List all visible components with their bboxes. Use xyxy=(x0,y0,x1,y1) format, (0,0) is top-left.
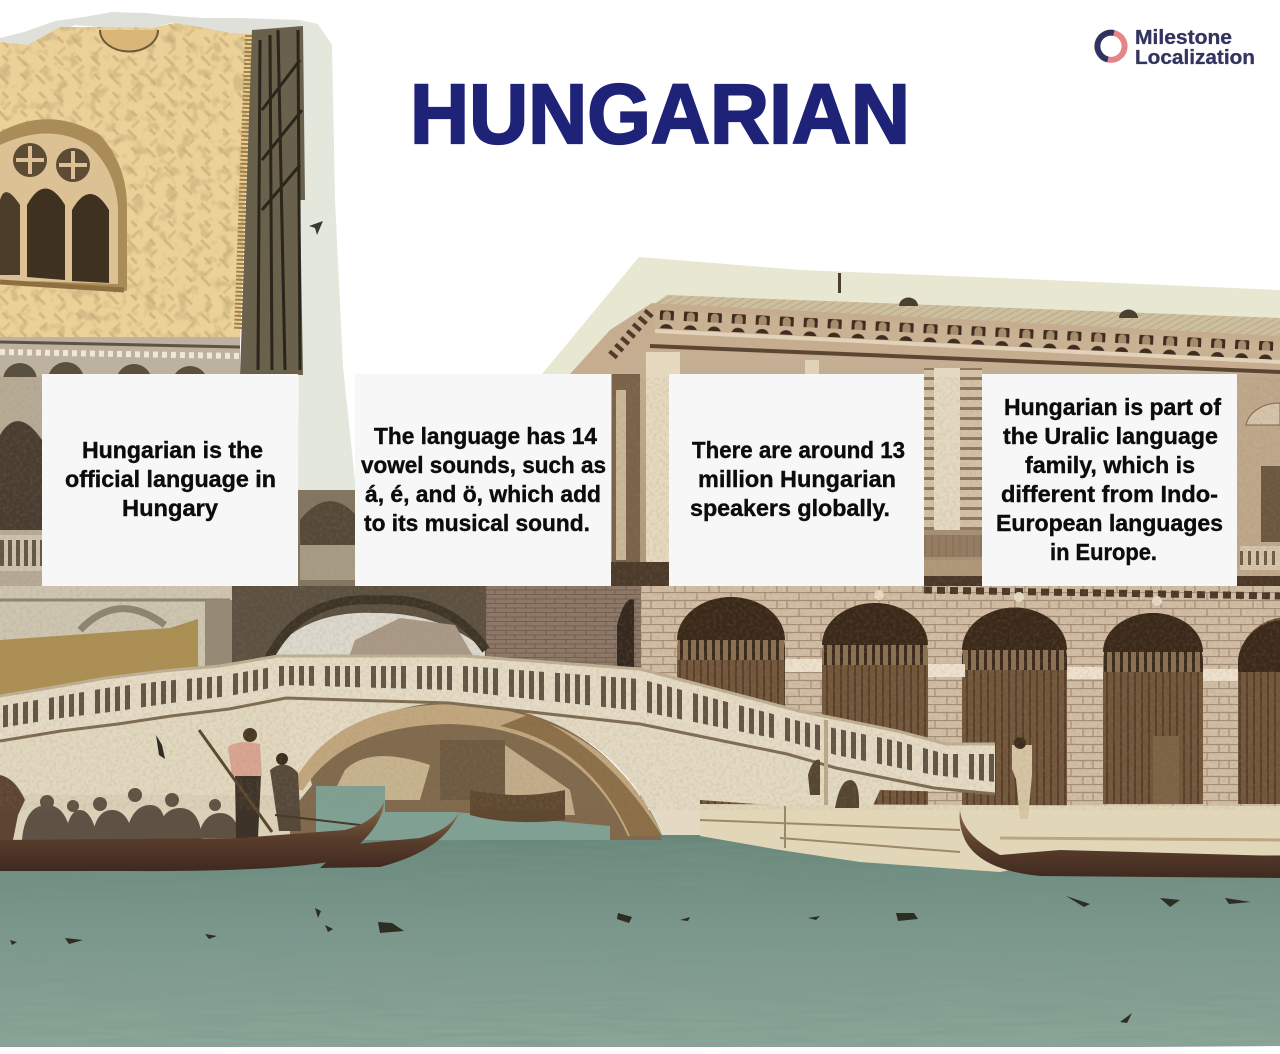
card 4: Uralic family: family, which is xyxy=(1025,452,1195,478)
medallion xyxy=(100,30,158,51)
man at left xyxy=(0,775,25,840)
bridge xyxy=(0,655,995,840)
card 4: Uralic family: different from Indo- xyxy=(1001,481,1218,507)
card 1: official language: Hungarian is the xyxy=(82,437,263,463)
yellow wall xyxy=(0,23,252,345)
window at right xyxy=(1237,374,1280,590)
logo wordmark: Localization xyxy=(1135,47,1255,69)
left of cards xyxy=(0,377,42,592)
balustrade xyxy=(0,655,995,793)
card 3: speakers xyxy=(669,374,924,586)
passengers xyxy=(22,788,240,840)
card 4: Uralic family: the Uralic language xyxy=(1003,423,1218,449)
logo wordmark xyxy=(1135,27,1255,69)
title: HUNGARIAN xyxy=(410,67,910,161)
facade mottling xyxy=(0,20,255,350)
roof xyxy=(653,295,1280,340)
brick wall behind bridge xyxy=(486,586,641,676)
gondola: back xyxy=(320,812,459,868)
building: arcades xyxy=(640,586,1280,808)
building: left facade xyxy=(0,12,305,592)
frieze xyxy=(924,576,1280,598)
logo wordmark: Milestone xyxy=(1135,27,1232,49)
seated figures xyxy=(808,760,859,808)
gondolier xyxy=(228,742,262,776)
logo xyxy=(1097,27,1255,69)
roof dormers xyxy=(838,273,1138,318)
gondola: front xyxy=(0,802,384,871)
wall behind passengers xyxy=(0,795,290,840)
card 3: speakers: million Hungarian xyxy=(698,466,896,492)
spandrel wall xyxy=(286,697,995,835)
card 2: vowel sounds: The language has 14 xyxy=(374,423,597,449)
building: left tower paper xyxy=(298,20,356,490)
card 4: Uralic family: Hungarian is part of xyxy=(1004,394,1221,420)
ornament band xyxy=(0,337,240,377)
dark arched doorway xyxy=(617,599,634,668)
view under the arch xyxy=(285,700,662,840)
window xyxy=(0,119,127,291)
hoarding xyxy=(0,619,198,695)
card 1: official language xyxy=(42,374,298,586)
rope moulding xyxy=(238,35,249,330)
scene grain xyxy=(0,377,1280,810)
arch band xyxy=(290,704,662,836)
balustrade openings xyxy=(0,666,995,782)
spandrel wall: left xyxy=(0,696,312,805)
arches xyxy=(677,597,785,806)
figure on quay xyxy=(1012,745,1032,819)
torn paper edge xyxy=(0,12,303,46)
card 3: speakers: There are around 13 xyxy=(692,437,905,463)
card 2: vowel sounds: to its musical sound. xyxy=(364,510,590,536)
icon: logo ring xyxy=(1097,33,1125,60)
bridge of sighs and gap stonework xyxy=(0,490,486,676)
boat passengers and gondoliers xyxy=(0,728,360,840)
building: right palace upper storey xyxy=(570,273,1280,598)
card 2: vowel sounds: vowel sounds, such as xyxy=(361,452,606,478)
paper cut-out: right building backing xyxy=(542,257,1280,400)
tower xyxy=(240,26,305,375)
card 4: Uralic family xyxy=(982,374,1237,586)
card 2: vowel sounds: á, é, and ö, which add xyxy=(365,481,601,507)
water stains xyxy=(10,735,1251,1023)
card 2: vowel sounds xyxy=(355,374,611,586)
cornice xyxy=(570,303,1280,376)
card 3: speakers: speakers globally. xyxy=(690,495,890,521)
card 1: official language: Hungary xyxy=(122,495,218,521)
water xyxy=(0,810,1280,1054)
second gondolier xyxy=(270,765,301,831)
quay xyxy=(700,720,1280,872)
card 1: official language: official language in xyxy=(65,466,276,492)
columns xyxy=(646,352,680,562)
card 4: Uralic family: European languages xyxy=(996,510,1223,536)
gondola: right xyxy=(960,810,1280,878)
card 4: Uralic family: in Europe. xyxy=(1050,539,1157,565)
